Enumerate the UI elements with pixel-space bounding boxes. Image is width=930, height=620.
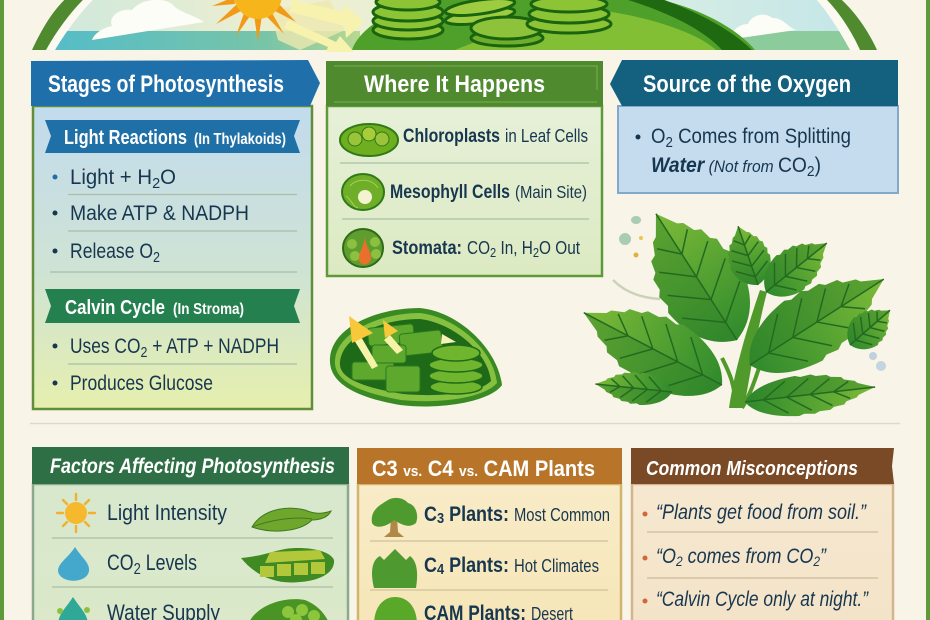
light reactions list: O xyxy=(160,166,176,189)
sun xyxy=(212,0,296,42)
panel: where it happens: Mesophyll Cells xyxy=(390,182,510,203)
misconception 2: 2 xyxy=(812,553,820,569)
panel: c3 vs c4 vs cam plants: Most Common xyxy=(514,505,610,525)
panel: factors affecting photosynthesis xyxy=(32,447,349,620)
panel: factors affecting photosynthesis: Levels xyxy=(141,550,197,575)
light reactions list: Make ATP & NADPH xyxy=(70,202,249,225)
panel: where it happens: O Out xyxy=(539,238,580,258)
ribbon: calvin cycle: Calvin Cycle xyxy=(65,297,165,319)
icon: c4 leaves xyxy=(372,549,417,588)
panel: factors affecting photosynthesis: Light Intensity xyxy=(107,500,227,525)
source text: 2 xyxy=(666,134,673,151)
icon: water drop xyxy=(58,547,89,581)
ribbon: light reactions: Light Reactions xyxy=(64,127,187,149)
c3 header xyxy=(357,448,622,484)
panel: where it happens: (Main Site) xyxy=(515,182,587,202)
panel: stages of photosynthesis xyxy=(31,60,320,409)
arrows xyxy=(349,316,403,369)
panel: factors affecting photosynthesis: 2 xyxy=(134,561,141,578)
panel: c3 vs c4 vs cam plants: 4 xyxy=(437,561,445,578)
panel: factors affecting photosynthesis: Factors Affecting Photosynthesis xyxy=(50,455,335,478)
panel: where it happens: Stomata: xyxy=(392,238,462,259)
light reactions list: Release O xyxy=(70,240,169,263)
illustration: leafy plant xyxy=(567,190,903,422)
panel: source of the oxygen xyxy=(610,60,898,193)
source text: ) xyxy=(815,154,821,177)
panel: c3 vs c4 vs cam plants: C3 vs. C4 vs. CAM Plants xyxy=(372,456,595,481)
stack of thylakoids, left xyxy=(373,0,443,39)
ribbon: calvin cycle: (In Stroma) xyxy=(173,301,244,318)
panel: factors affecting photosynthesis: CO xyxy=(107,550,140,575)
panel: where it happens xyxy=(326,61,603,276)
icon: green seed pod xyxy=(248,599,330,620)
light reactions list: 2 xyxy=(152,175,160,192)
source header xyxy=(610,60,898,106)
panel: c3 vs c4 vs cam plants xyxy=(357,448,622,620)
misconception 2 xyxy=(642,545,827,569)
calvin cycle list: Produces Glucose xyxy=(70,372,213,395)
icon: chloroplast xyxy=(340,124,398,156)
stages header xyxy=(31,60,320,106)
factors header xyxy=(32,447,349,484)
panel: where it happens: in Leaf Cells xyxy=(505,126,588,146)
panel: c3 vs c4 vs cam plants: Plants: xyxy=(444,503,509,526)
icon: leaf xyxy=(252,508,331,531)
misconceptions header xyxy=(631,448,894,484)
ribbon: light reactions: (In Thylakoids) xyxy=(194,131,286,148)
misconception 3: “Calvin Cycle only at night.” xyxy=(656,588,869,611)
sun rays arrows xyxy=(284,0,364,52)
ribbon: calvin cycle xyxy=(45,289,300,323)
light reactions list: 2 xyxy=(153,249,160,266)
icon: mesophyll cell xyxy=(342,174,384,210)
panel: common misconceptions xyxy=(631,448,894,620)
calvin cycle list: 2 xyxy=(140,344,147,361)
panel: source of the oxygen: Source of the Oxygen xyxy=(643,71,851,98)
panel: where it happens: Chloroplasts xyxy=(403,126,500,147)
icon: sun xyxy=(57,494,95,532)
source text: 2 xyxy=(807,163,815,180)
icon: c3 tree xyxy=(372,498,417,537)
panel: c3 vs c4 vs cam plants: 3 xyxy=(437,510,444,527)
source text: Water (Not from CO xyxy=(651,154,809,177)
misconception 2: 2 xyxy=(675,553,683,569)
icon: green pod xyxy=(241,548,334,583)
light reactions list: Light + H xyxy=(70,166,155,189)
source text: O xyxy=(651,125,667,148)
panel: where it happens: CO xyxy=(467,238,494,258)
where header: Where It Happens xyxy=(364,71,545,98)
panel: c3 vs c4 vs cam plants: Hot Climates xyxy=(514,556,599,576)
misconception 1: “Plants get food from soil.” xyxy=(656,501,867,524)
source text: Comes from Splitting xyxy=(673,125,851,148)
icon: stomata xyxy=(343,229,383,267)
misconception 2: “O xyxy=(656,545,679,568)
misconception 2: comes from CO xyxy=(683,545,813,568)
source text xyxy=(636,125,851,180)
panel: where it happens: 2 xyxy=(533,245,539,260)
panel: c3 vs c4 vs cam plants: Plants: xyxy=(444,554,509,577)
where header xyxy=(326,61,603,106)
stack of thylakoids, right xyxy=(527,0,611,33)
panel: common misconceptions: Common Misconceptions xyxy=(646,458,858,480)
panel: stages of photosynthesis: Stages of Photosynthesis xyxy=(48,71,284,98)
icon: cam succulent xyxy=(374,597,417,620)
panel: c3 vs c4 vs cam plants: C xyxy=(424,554,439,577)
stack of thylakoids, middle xyxy=(444,0,516,28)
panel: where it happens: 2 xyxy=(490,245,496,260)
light reactions list xyxy=(50,166,297,272)
panel: where it happens: In, H xyxy=(496,238,533,258)
panel: c3 vs c4 vs cam plants: C xyxy=(424,503,439,526)
stack of thylakoids, front xyxy=(471,17,543,46)
hero illustration: chloroplast landscape xyxy=(32,0,877,52)
icon: water droplet with sparkle xyxy=(57,597,90,620)
calvin cycle list xyxy=(52,335,297,395)
misconception 2: ” xyxy=(820,545,827,568)
calvin cycle list: Uses CO xyxy=(70,335,155,358)
illustration: chloroplast cross-section xyxy=(330,308,502,406)
calvin cycle list: + ATP + NADPH xyxy=(147,335,279,358)
ribbon: light reactions xyxy=(45,120,300,153)
